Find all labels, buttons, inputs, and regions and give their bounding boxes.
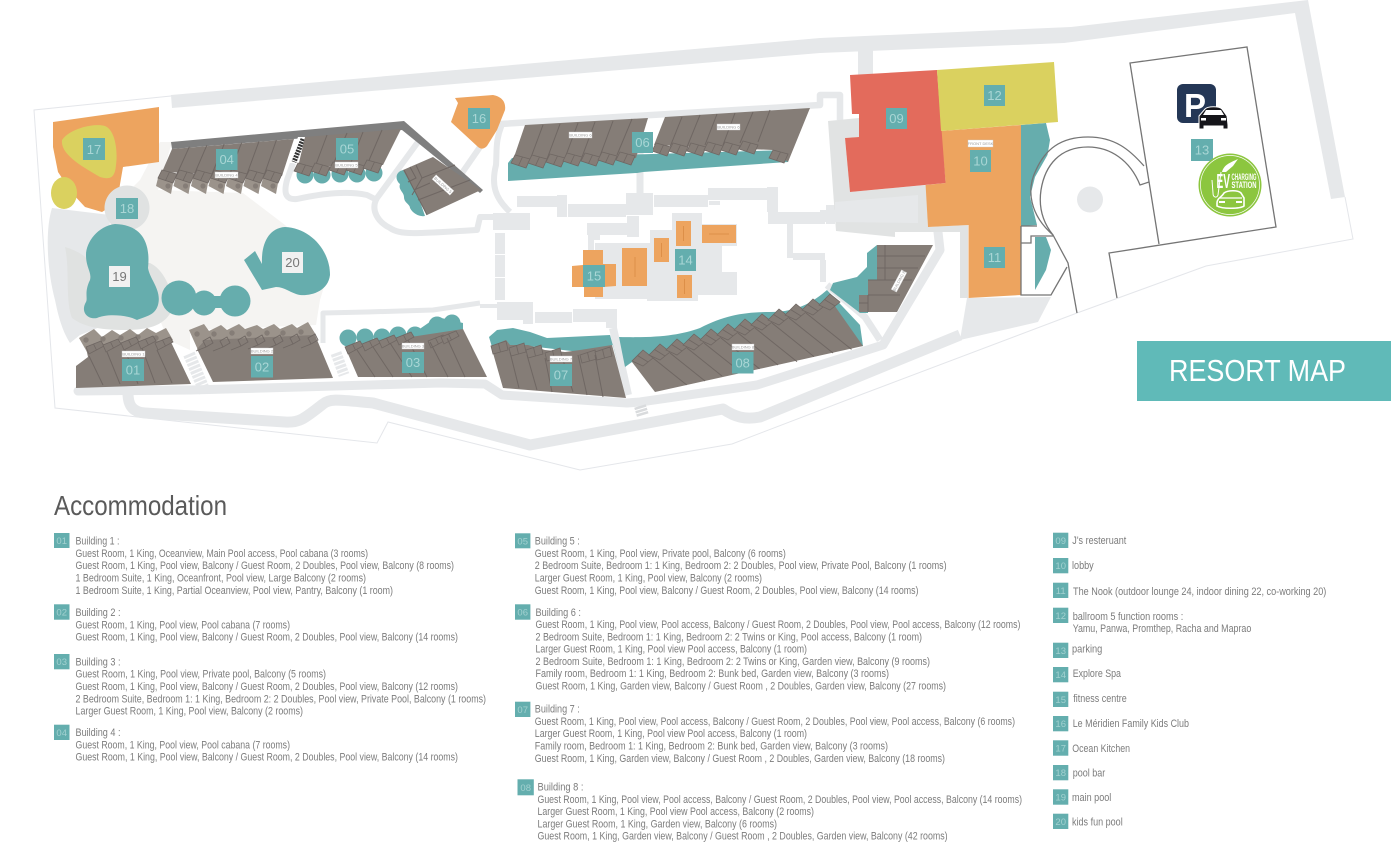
zone 16: kids club: 16 [472, 111, 486, 126]
zones 10 and 11: lobby and The Nook: 11 [988, 250, 1001, 265]
building 3: 03 [406, 355, 420, 370]
icon: EV charging station [1198, 154, 1262, 216]
legend: building 1 [54, 533, 454, 597]
legend: building 6: 2 Bedroom Suite, Bedroom 1: 1 King, Bedroom 2: 2 Twins or King, Pool access, Balcony (1 room) [536, 632, 922, 644]
legend: building 3: 03 [56, 657, 67, 668]
item 18: pool bar [1073, 768, 1106, 780]
lobed pool [162, 280, 250, 316]
annex of building 5: BUILDING 5 [433, 176, 454, 195]
item 12: Yamu, Panwa, Promthep, Racha and Maprao [1073, 623, 1251, 635]
legend: building 3: Guest Room, 1 King, Pool view, Private pool, Balcony (5 rooms) [76, 668, 326, 680]
item 16 [1053, 716, 1189, 731]
building 2: 02 [255, 360, 269, 374]
item 09: 09 [1055, 536, 1066, 547]
legend: building 7: Larger Guest Room, 1 King, Pool view Pool access, Balcony (1 room) [535, 728, 807, 740]
legend: building 3: Building 3 : [76, 656, 120, 668]
item 13: 13 [1055, 646, 1066, 657]
item 11: 11 [1056, 586, 1066, 597]
banner: resort map: RESORT MAP [1169, 353, 1346, 388]
item 10: lobby [1072, 560, 1094, 572]
item 11: The Nook (outdoor lounge 24, indoor dining 22, co-working 20) [1073, 586, 1326, 598]
legend: building 7 [515, 702, 1015, 765]
heading: accommodation: Accommodation [54, 490, 227, 521]
icon: parking [1177, 84, 1228, 129]
zones 14 and 15: spa and fitness pavilions: 14 [678, 252, 693, 268]
item 10: 10 [1055, 561, 1066, 572]
legend: building 3: Guest Room, 1 King, Pool view, Balcony / Guest Room, 2 Doubles, Pool view, Balcony (12 rooms) [76, 681, 458, 693]
zone 17: Ocean Kitchen: 17 [87, 142, 101, 157]
zone 19: main pool: 19 [112, 269, 127, 284]
item 20: 20 [1055, 817, 1066, 828]
building 1: BUILDING 1 [122, 352, 145, 356]
item 19: main pool [1072, 792, 1111, 804]
legend: facilities [1053, 533, 1326, 829]
map [34, 0, 1353, 470]
stairs beside building 5 [288, 137, 311, 163]
legend: building 5 [515, 533, 947, 597]
item 15: fitness centre [1073, 693, 1127, 705]
legend: building 5: 05 [517, 536, 528, 547]
item 14: 14 [1055, 670, 1066, 681]
zone 12: ballroom: 12 [987, 88, 1002, 103]
legend: building 6: Guest Room, 1 King, Pool view, Pool access, Balcony / Guest Room, 2 Doubles, Pool view, Pool access, Balcony (12 rooms) [536, 619, 1020, 631]
legend: building 1: 1 Bedroom Suite, 1 King, Oceanfront, Pool view, Large Balcony (2 rooms) [76, 572, 366, 584]
item 14 [1053, 667, 1122, 682]
legend: building 5: Larger Guest Room, 1 King, Pool view, Balcony (2 rooms) [535, 572, 762, 584]
zone 18: pool bar [104, 186, 150, 230]
item 15 [1053, 692, 1127, 707]
legend: building 4: Guest Room, 1 King, Pool view, Balcony / Guest Room, 2 Doubles, Pool view, Balcony (14 rooms) [76, 752, 458, 764]
zones 10 and 11: lobby and The Nook: FRONT DESK [968, 141, 994, 146]
item 15: 15 [1055, 695, 1066, 706]
item 17: Ocean Kitchen [1072, 743, 1130, 755]
legend: building 4 [54, 725, 458, 764]
annex of building 5 [397, 157, 481, 216]
legend: building 6: Building 6 : [536, 607, 581, 619]
walkways and spa terrace [480, 187, 835, 328]
item 13: parking [1072, 644, 1102, 656]
building 4 [156, 121, 483, 194]
building 6 [508, 108, 810, 181]
pool deck [48, 142, 330, 350]
legend: building 1: 1 Bedroom Suite, 1 King, Partial Oceanview, Pool view, Pantry, Balcony (1 room) [76, 585, 393, 597]
item 10 [1053, 558, 1094, 573]
legend: building 4: Building 4 : [76, 727, 120, 739]
building 3 [340, 314, 487, 377]
legend: building 5: 2 Bedroom Suite, Bedroom 1: 1 King, Bedroom 2: 2 Doubles, Pool view, Private Pool, Balcony (1 rooms) [535, 560, 947, 572]
legend: building 2: Building 2 : [76, 607, 120, 619]
legend: building 5: Guest Room, 1 King, Pool view, Private pool, Balcony (6 rooms) [535, 548, 786, 560]
item 17: 17 [1055, 744, 1066, 754]
item 20 [1053, 814, 1123, 829]
zone 16: kids club [451, 95, 505, 149]
zone 9: J's restaurant: 09 [889, 111, 904, 126]
zones 14 and 15: spa and fitness pavilions: 15 [587, 268, 601, 284]
building 7 [489, 328, 626, 398]
annex of building 8: BUILDING 8 [892, 269, 907, 292]
driveway outlines [1021, 137, 1149, 313]
item 09: J's resteruant [1072, 535, 1126, 547]
legend: building 6: 2 Bedroom Suite, Bedroom 1: 1 King, Bedroom 2: 2 Twins or King, Garden view, Balcony (9 rooms) [536, 656, 930, 668]
legend: building 7: Guest Room, 1 King, Garden view, Balcony / Guest Room , 2 Doubles, Garden view, Balcony (18 rooms) [535, 753, 945, 765]
legend: building 8: Guest Room, 1 King, Garden view, Balcony / Guest Room , 2 Doubles, Garden view, Balcony (42 rooms) [538, 830, 948, 842]
zones 10 and 11: lobby and The Nook: 10 [973, 154, 988, 168]
icon: EV charging station: STATION [1232, 180, 1257, 191]
legend: building 8: Larger Guest Room, 1 King, Pool view Pool access, Balcony (2 rooms) [538, 806, 814, 818]
legend: building 2: 02 [56, 608, 67, 618]
zone 13 number [1191, 139, 1213, 161]
legend: building 2 [54, 604, 458, 644]
item 12: ballroom 5 function rooms : [1073, 611, 1183, 623]
hotel forecourt [820, 118, 968, 298]
legend: building 2: Guest Room, 1 King, Pool view, Balcony / Guest Room, 2 Doubles, Pool view, Balcony (14 rooms) [76, 632, 458, 644]
zone 20: kids fun pool: 20 [285, 255, 300, 270]
zone 17: Ocean Kitchen [51, 107, 159, 212]
building 1 [76, 328, 191, 388]
item 16: Le Méridien Family Kids Club [1073, 718, 1189, 730]
building 7: BUILDING 7 [550, 356, 573, 362]
legend: building 8: Guest Room, 1 King, Pool view, Pool access, Balcony / Guest Room, 2 Doubles, Pool view, Pool access, Balcony (14 rooms) [538, 794, 1022, 806]
icon: EV charging station: CHARGING [1232, 172, 1256, 183]
item 19: 19 [1055, 792, 1066, 804]
legend: building 3: 2 Bedroom Suite, Bedroom 1: 1 King, Bedroom 2: 2 Doubles, Pool view, Private Pool, Balcony (1 rooms) [76, 693, 486, 705]
legend: building 7: 07 [517, 705, 528, 716]
building 5 [294, 129, 401, 184]
item 17 [1053, 740, 1130, 756]
lobby and Nook terrace pool [1021, 123, 1051, 290]
building 6: 06 [635, 135, 650, 150]
legend: building 7: Building 7 : [535, 704, 580, 716]
legend: building 5: Building 5 : [535, 536, 580, 548]
building 1: 01 [126, 362, 140, 378]
legend: building 6: Larger Guest Room, 1 King, Pool view Pool access, Balcony (1 room) [536, 644, 807, 656]
legend: building 2: Guest Room, 1 King, Pool view, Pool cabana (7 rooms) [76, 619, 290, 631]
item 14: Explore Spa [1073, 668, 1122, 680]
zones 14 and 15: spa and fitness pavilions [572, 221, 736, 298]
building 6: BUILDING 6 [569, 132, 592, 138]
icon: EV charging station: EV [1216, 171, 1230, 193]
building 8 [619, 290, 863, 392]
legend: building 1: Guest Room, 1 King, Pool view, Balcony / Guest Room, 2 Doubles, Pool view, Balcony (8 rooms) [76, 560, 454, 572]
item 12: 12 [1055, 611, 1066, 622]
item 12 [1053, 608, 1251, 635]
legend: building 1: Guest Room, 1 King, Oceanview, Main Pool access, Pool cabana (3 rooms) [76, 548, 368, 560]
site boundary [34, 96, 1353, 470]
building 4: 04 [219, 152, 234, 167]
building 6: BUILDING 6 [717, 124, 740, 130]
zone 12: ballroom [937, 62, 1058, 131]
legend: building 7: Guest Room, 1 King, Pool view, Pool access, Balcony / Guest Room, 2 Doubles, Pool view, Pool access, Balcony (6 rooms) [535, 716, 1015, 728]
zone 20: kids fun pool [244, 227, 330, 295]
legend: building 6 [515, 604, 1020, 692]
item 11 [1053, 583, 1326, 598]
item 16: 16 [1055, 719, 1066, 730]
legend: building 5: Guest Room, 1 King, Pool view, Balcony / Guest Room, 2 Doubles, Pool view, Balcony (14 rooms) [535, 585, 918, 597]
item 18: 18 [1055, 768, 1066, 779]
building 2: BUILDING 2 [251, 348, 274, 354]
item 09 [1053, 533, 1126, 548]
zone 18: pool bar: 18 [120, 201, 134, 216]
item 13 [1053, 643, 1102, 658]
road network [78, 0, 1345, 445]
legend: building 1: Building 1 : [76, 536, 120, 548]
legend: building 8 [518, 779, 1022, 842]
legend: building 4: Guest Room, 1 King, Pool view, Pool cabana (7 rooms) [76, 739, 290, 751]
zone 13: parking lot outline [1109, 47, 1276, 298]
building 8: 08 [735, 356, 750, 370]
building 8: BUILDING 8 [732, 344, 755, 350]
legend: building 8: Larger Guest Room, 1 King, Garden view, Balcony (6 rooms) [538, 818, 777, 830]
building 4: BUILDING 4 [215, 172, 238, 178]
stairs [189, 353, 643, 416]
zones 10 and 11: lobby and The Nook [926, 125, 1021, 298]
legend: building 1: 01 [56, 536, 67, 547]
legend: building 6: Guest Room, 1 King, Garden view, Balcony / Guest Room , 2 Doubles, Garden view, Balcony (27 rooms) [536, 680, 946, 692]
icon: parking: P [1184, 87, 1206, 124]
legend: building 8: 08 [520, 783, 531, 794]
legend: building 3 [54, 654, 486, 718]
zone 13 number: 13 [1195, 142, 1209, 158]
legend: building 8: Building 8 : [538, 782, 584, 794]
legend: building 3: Larger Guest Room, 1 King, Pool view, Balcony (2 rooms) [76, 706, 303, 718]
zone 19: main pool [84, 224, 159, 320]
annex of building 8 [830, 245, 933, 313]
legend: building 7: Family room, Bedroom 1: 1 King, Bedroom 2: Bunk bed, Garden view, Balcony (3 rooms) [535, 740, 888, 752]
item 20: kids fun pool [1072, 816, 1123, 828]
legend: building 6: 06 [517, 608, 528, 618]
item 19 [1053, 789, 1111, 805]
zone 9: J's restaurant [845, 70, 946, 192]
item 18 [1053, 765, 1106, 780]
building 5: 05 [340, 142, 354, 156]
building 3: BUILDING 3 [402, 344, 425, 348]
building 5: BUILDING 5 [335, 162, 358, 168]
legend: building 6: Family room, Bedroom 1: 1 King, Bedroom 2: Bunk bed, Garden view, Balcony (3 rooms) [536, 668, 889, 680]
building 7: 07 [554, 368, 568, 382]
legend: building 4: 04 [56, 728, 67, 739]
banner: resort map [1137, 341, 1391, 401]
building 2 [189, 322, 333, 382]
